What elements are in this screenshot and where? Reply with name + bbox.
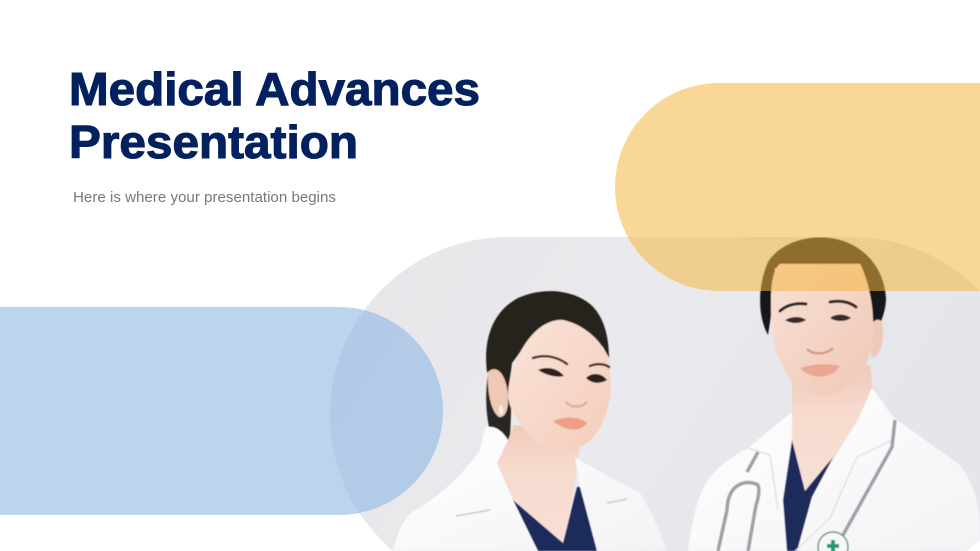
woman coat — [393, 427, 667, 551]
man ear — [871, 320, 883, 358]
woman ear — [488, 369, 508, 417]
title — [69, 63, 480, 168]
woman earring — [499, 405, 503, 415]
woman lapel shadows — [456, 499, 627, 516]
man eyebrows — [780, 301, 856, 311]
man coat — [688, 388, 980, 551]
man stethoscope — [718, 420, 895, 551]
woman nose — [566, 402, 587, 406]
badge cross — [827, 540, 839, 551]
man scrubs — [783, 440, 833, 551]
title line 1: Medical Advances — [69, 63, 480, 115]
man eyes — [785, 315, 851, 323]
woman ponytail — [486, 375, 512, 441]
man badge — [818, 532, 848, 551]
panel: blue pill — [0, 307, 443, 515]
woman eyebrows — [533, 356, 609, 367]
woman neck — [497, 425, 582, 545]
panel: photo of two doctors — [330, 237, 980, 551]
title line 2: Presentation — [69, 116, 358, 168]
man face — [771, 264, 874, 396]
man hair — [760, 237, 886, 335]
man collar lines — [748, 440, 893, 551]
woman scrubs — [513, 487, 597, 551]
woman doctor — [393, 291, 667, 551]
man nose — [807, 348, 833, 353]
man neck — [792, 365, 873, 491]
subtitle: Here is where your presentation begins — [73, 189, 336, 206]
panel: orange pill — [615, 83, 980, 291]
woman hair — [486, 291, 609, 395]
woman eyes — [538, 368, 607, 383]
woman lips — [553, 417, 587, 430]
man lips — [800, 364, 840, 377]
man doctor — [688, 237, 980, 551]
woman face — [508, 320, 611, 450]
